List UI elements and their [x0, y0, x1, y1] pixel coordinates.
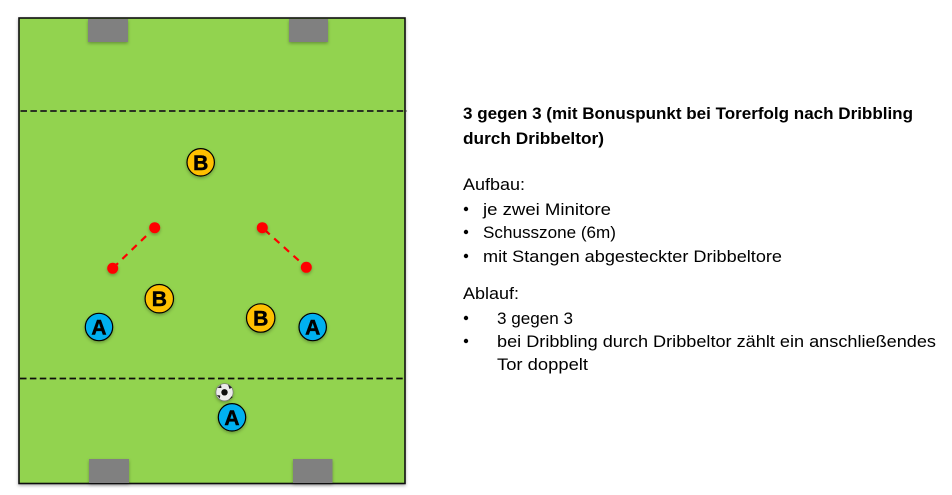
player A with ball	[218, 404, 246, 431]
panel: football pitch	[19, 18, 407, 484]
icon: bottom left mini goal	[89, 459, 129, 483]
player B top	[187, 149, 214, 176]
player B right	[247, 304, 275, 332]
right dribble gate	[257, 222, 312, 273]
top shooting zone line	[20, 110, 407, 112]
player A left	[85, 313, 113, 341]
heading: 3 gegen 3 (mit Bonuspunkt bei Torerfolg nach Dribbling	[463, 104, 913, 123]
left dribble gate	[107, 222, 160, 274]
pitch surface	[19, 18, 405, 484]
player B top: B	[193, 152, 208, 175]
procedure list: Tor doppelt	[497, 355, 588, 374]
bottom shooting zone line	[20, 378, 405, 380]
procedure list	[463, 284, 936, 374]
setup list: Schusszone (6m)	[483, 223, 616, 242]
player B left: B	[152, 288, 167, 311]
player A right	[299, 313, 326, 341]
heading	[463, 104, 913, 148]
player A right: A	[305, 316, 320, 340]
procedure list: bei Dribbling durch Dribbeltor zählt ein anschließendes	[497, 332, 936, 351]
icon: top right mini goal	[289, 19, 328, 42]
player B right: B	[253, 308, 268, 330]
procedure list: Ablauf:	[463, 284, 519, 303]
icon: bottom right mini goal	[293, 459, 332, 483]
procedure list: 3 gegen 3	[497, 309, 573, 328]
text block: description	[463, 104, 936, 374]
setup list: mit Stangen abgesteckter Dribbeltore	[483, 247, 782, 266]
setup list: Aufbau:	[463, 175, 525, 194]
player A with ball: A	[224, 407, 240, 430]
icon: top left mini goal	[88, 19, 128, 42]
player A left: A	[91, 316, 107, 340]
setup list: je zwei Minitore	[482, 200, 611, 219]
icon: football	[216, 384, 233, 401]
heading: durch Dribbeltor)	[463, 129, 604, 148]
setup list	[463, 175, 782, 266]
player B left	[145, 284, 174, 313]
